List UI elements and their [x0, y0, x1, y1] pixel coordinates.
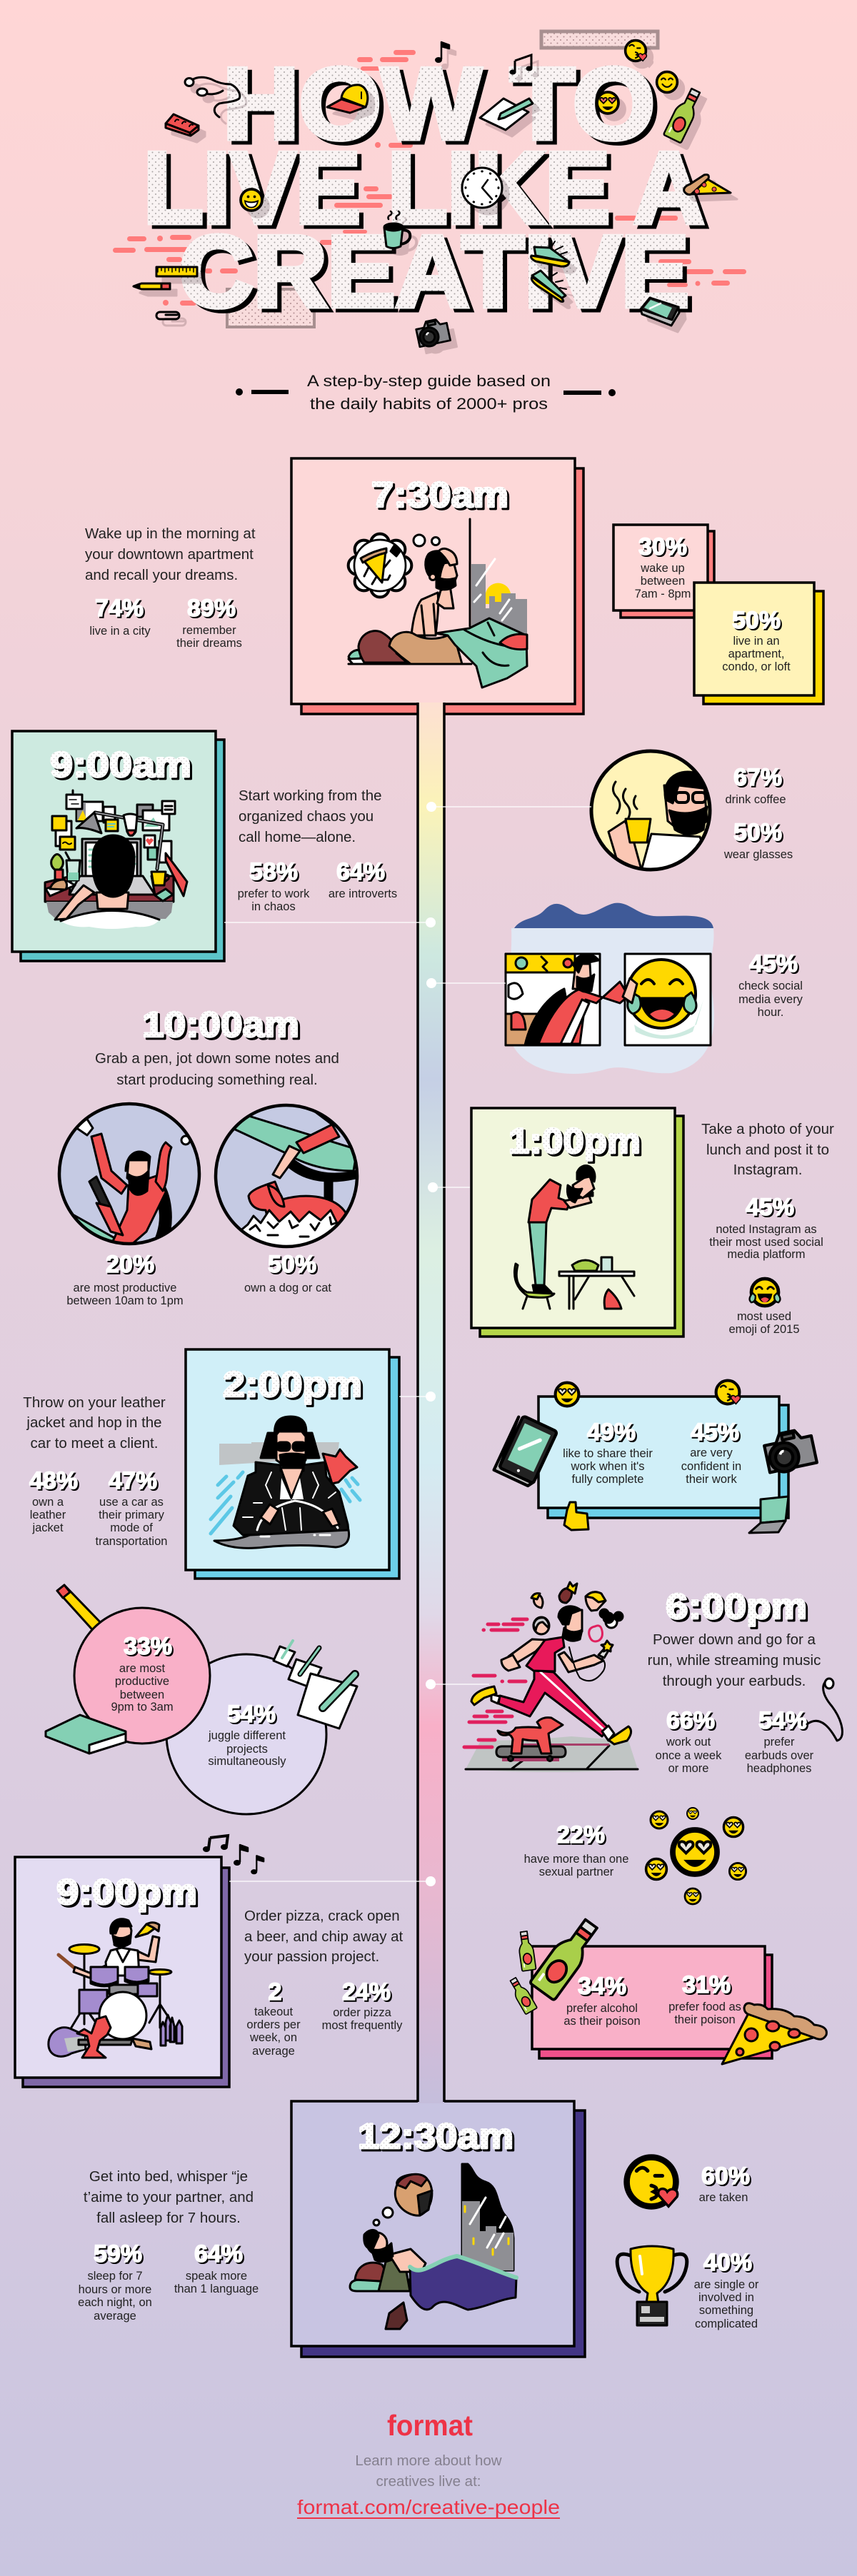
stat: 45% instagram [709, 1194, 823, 1261]
heading: 10:00am: 10:00am [142, 1005, 299, 1045]
heading: 2:00pm: 2:00pm [223, 1364, 362, 1404]
stat: 48%: jacket [31, 1521, 64, 1534]
stat: 45% confident: 45% [691, 1419, 739, 1446]
stat: 89%: remember [182, 624, 236, 637]
stat: 45% confident [681, 1419, 741, 1486]
stat: 64%: are introverts [329, 887, 397, 900]
stat: 45% instagram: media platform [727, 1248, 806, 1261]
stat: 66%: work out [666, 1736, 711, 1749]
icon: camera [763, 1427, 818, 1475]
footer: learn more [355, 2452, 502, 2490]
icon: sneakers [531, 241, 569, 301]
text: take a photo [701, 1121, 834, 1178]
stat: 45% confident: confident in [681, 1460, 741, 1473]
text: start working: organized chaos you [239, 808, 374, 825]
panel: 30% wake up: 7am - 8pm [635, 588, 691, 600]
text: wake up: your downtown apartment [85, 546, 254, 563]
subtitle: the daily habits of 2000+ pros [310, 395, 548, 413]
text: take a photo: Take a photo of your [701, 1121, 834, 1137]
stat: 89%: their dreams [176, 637, 242, 650]
stat: 40%: something [699, 2304, 753, 2317]
stat: 64% [329, 858, 397, 900]
title: HOW TO [223, 47, 655, 161]
stat: 50% glasses: 50% [733, 819, 782, 846]
icon: heart eyes emoji [597, 92, 618, 114]
stat: 31%: prefer food as [668, 2001, 741, 2013]
icon: kiss emoji [716, 1381, 741, 1404]
stat: 45% social media: hour. [758, 1006, 783, 1019]
illustration: photographing lunch [514, 1166, 634, 1309]
text: grab a pen [95, 1050, 339, 1088]
panel: 9:00am [12, 731, 224, 961]
text: take a photo: lunch and post it to [706, 1142, 829, 1158]
stat: 31%: 31% [682, 1971, 731, 1998]
stat: 33%: between [120, 1689, 164, 1701]
stat: 64% languages [174, 2240, 259, 2295]
circle: 54% juggling [166, 1654, 326, 1814]
stat: 34%: as their poison [563, 2015, 641, 2028]
icon: multitasking circle [57, 1104, 199, 1257]
subtitle [307, 372, 551, 413]
icon: drinking coffee circle [591, 751, 714, 878]
icon: laughing emoji [750, 1279, 780, 1306]
stat: 54% earbuds: headphones [747, 1762, 811, 1775]
title icons [134, 41, 731, 348]
stat: 45% confident: their work [686, 1473, 738, 1486]
panel: 50% apartment: live in an [733, 635, 780, 648]
timeline dots [426, 802, 438, 1886]
illustration: notes and pens [274, 1641, 357, 1729]
icon: pizza slice [684, 175, 731, 194]
stat: 47%: transportation [96, 1535, 167, 1548]
heading: 6:00pm: 6:00pm [666, 1586, 807, 1626]
panel: 50% apartment: apartment, [728, 648, 784, 660]
stat: 74%: 74% [95, 595, 144, 622]
stat: 58%: 58% [249, 858, 298, 885]
stat: 66%: or more [668, 1762, 708, 1775]
stat: 20% [66, 1251, 184, 1307]
stat: 24%: 24% [342, 1978, 391, 2006]
text: power down: run, while streaming music [648, 1652, 821, 1669]
stat: 45% instagram: their most used social [709, 1236, 823, 1249]
icon: kiss emoji [627, 2158, 678, 2206]
stat: 33%: 33% [124, 1633, 172, 1660]
text: order pizza: a beer, and chip away at [244, 1928, 404, 1945]
title [144, 47, 704, 328]
panel: 2:00pm [186, 1349, 399, 1579]
icon: music notes [435, 42, 533, 74]
text: get into bed: t’aime to your partner, and [84, 2189, 254, 2205]
stat: 45% social media: 45% [749, 950, 798, 977]
stat: 74%: live in a city [89, 625, 151, 638]
icon: clock [462, 168, 502, 208]
circle: 33% productive [74, 1608, 210, 1744]
icon: bottles [507, 1915, 603, 2015]
icon: earbuds [185, 77, 240, 117]
icon: ruler [156, 267, 197, 276]
icon: smile emoji [657, 72, 677, 92]
stat: 40%: 40% [703, 2249, 752, 2276]
stat: 60%: are taken [699, 2191, 748, 2204]
heading: 1:00pm: 1:00pm [508, 1121, 641, 1161]
stat: 54% earbuds: 54% [758, 1707, 807, 1734]
stat: 2 takeout: takeout [254, 2006, 293, 2018]
stat: 34%: 34% [578, 1973, 626, 2000]
panel: 12:30am [291, 2101, 585, 2357]
text: throw on jacket [23, 1394, 166, 1451]
stat: 59%: 59% [94, 2240, 142, 2268]
text: start working: call home—alone. [239, 829, 356, 845]
stat: 47%: mode of [110, 1521, 153, 1534]
icon: coffee mug [384, 211, 410, 248]
stat: 59%: hours or more [79, 2283, 151, 2296]
stat: 60% [699, 2163, 750, 2204]
icon: music notes [203, 1836, 264, 1874]
stat: 89% [176, 595, 242, 650]
footer: format logo: format [387, 2409, 473, 2442]
timeline [224, 703, 591, 2103]
panel: 50% apartment: 50% [732, 607, 781, 634]
heading: 9:00am: 9:00am [50, 745, 191, 785]
stat: 47%: 47% [109, 1467, 157, 1494]
header decor: coral speed dashes [113, 50, 746, 306]
stat: 34%: prefer alcohol [566, 2002, 638, 2015]
stat: 33%: productive [115, 1675, 169, 1688]
panel: 9:00pm [15, 1857, 229, 2087]
heading: 12:30am: 12:30am [358, 2116, 513, 2156]
illustration: runner and dog on skateboard [464, 1582, 638, 1772]
stat: 58% [238, 858, 310, 913]
text: throw on jacket: jacket and hop in the [26, 1414, 162, 1431]
text: order pizza: your passion project. [244, 1948, 379, 1965]
stat: 54% earbuds: prefer [763, 1736, 795, 1749]
stat: 66%: 66% [666, 1707, 715, 1734]
stat: 54%: juggle different [208, 1729, 286, 1742]
illustration: driving [211, 1417, 360, 1548]
stat: 33%: 9pm to 3am [111, 1701, 174, 1714]
footer: learn more: creatives live at: [376, 2473, 481, 2490]
panel: 50% apartment: condo, or loft [722, 660, 791, 673]
stat: 50% glasses: wear glasses [723, 848, 793, 861]
stat: 20%: 20% [106, 1251, 154, 1278]
stat: 40%: complicated [695, 2318, 758, 2330]
stat: 54%: 54% [227, 1701, 276, 1728]
text: order pizza: Order pizza, crack open [244, 1908, 400, 1924]
icon: beer bottle [663, 86, 704, 143]
subtitle ornaments [236, 388, 616, 396]
stat: 45% social media [738, 950, 803, 1019]
stat: 54% earbuds [745, 1707, 814, 1775]
stat: 2 takeout: orders per [246, 2018, 301, 2031]
stat: 24%: order pizza [333, 2006, 392, 2019]
stat: 47%: use a car as [99, 1496, 164, 1509]
illustration: social media [506, 903, 714, 1074]
icon: heart-eyes emoji cluster [646, 1808, 746, 1904]
illustration: working at a messy desk [45, 790, 187, 929]
stat: 2 takeout: average [252, 2045, 295, 2058]
text: wake up: Wake up in the morning at [85, 525, 256, 542]
panel: 1:00pm [471, 1108, 683, 1337]
header decor: dotted frames [227, 31, 658, 327]
icon: tablet [494, 1414, 557, 1487]
text: start working: Start working from the [239, 788, 382, 804]
icon: kiss emoji [626, 41, 646, 61]
text: wake up: and recall your dreams. [85, 567, 238, 583]
stat: 48% [29, 1467, 78, 1534]
stat: 49%: work when it's [570, 1460, 645, 1473]
icon: note and pen [480, 99, 533, 130]
stat: 22%: have more than one [524, 1853, 628, 1866]
speed lines [464, 1619, 527, 1747]
footer: link: format.com/creative-people [297, 2496, 560, 2518]
text: order pizza [244, 1908, 404, 1965]
stat: 58%: prefer to work [238, 887, 310, 900]
illustration: waking up in bed [348, 519, 527, 688]
stat: 40%: are single or [694, 2278, 759, 2291]
connector lines [224, 807, 591, 1881]
stat: 74% [89, 595, 151, 638]
text: grab a pen: Grab a pen, jot down some notes and [95, 1050, 339, 1067]
stat: 59%: average [94, 2310, 136, 2323]
icon: cap [327, 85, 368, 113]
text: get into bed [84, 2168, 254, 2226]
stat: 22% [524, 1821, 628, 1878]
stat: 54% earbuds: earbuds over [745, 1749, 814, 1762]
text: most used emoji: emoji of 2015 [728, 1323, 800, 1336]
stat: 47%: their primary [99, 1509, 165, 1521]
stat: 67%: drink coffee [726, 793, 786, 806]
stat: 2 takeout: week, on [249, 2031, 297, 2044]
stat: 45% instagram: noted Instagram as [716, 1223, 817, 1236]
icon: dog and chair circle [216, 1103, 357, 1253]
stat: 50% pets: 50% [268, 1251, 316, 1278]
text: grab a pen: start producing something real. [116, 1072, 318, 1088]
text: throw on jacket: Throw on your leather [23, 1394, 166, 1411]
icon: pizza slice [722, 2003, 826, 2064]
stat: 45% confident: are very [690, 1447, 733, 1459]
panel: 30% wake up: wake up [640, 562, 685, 575]
text: get into bed: Get into bed, whisper “je [89, 2168, 248, 2185]
stat: 67% [726, 764, 786, 806]
stat: 31%: their poison [674, 2013, 736, 2026]
stat: 45% social media: check social [738, 980, 803, 992]
stat: 59%: sleep for 7 [87, 2270, 143, 2283]
stat: 49%: fully complete [572, 1473, 643, 1486]
stat: 20%: are most productive [74, 1282, 176, 1294]
panel: 50% apartment [694, 583, 823, 704]
icon: lego brick [166, 114, 199, 136]
stat: 48%: 48% [29, 1467, 78, 1494]
stat: 58%: in chaos [251, 900, 296, 913]
stat: 59% [78, 2240, 152, 2323]
stat: 60%: 60% [701, 2163, 750, 2190]
heading: 7:30am: 7:30am [371, 475, 508, 515]
stat: 64% languages: speak more [186, 2270, 247, 2283]
stat: 89%: 89% [187, 595, 236, 622]
stat: 50% glasses [723, 819, 793, 861]
icon: earbud cord [807, 1679, 842, 1741]
text: get into bed: fall asleep for 7 hours. [96, 2210, 241, 2226]
stat: 64% languages: 64% [194, 2240, 243, 2268]
icon: trophy [617, 2246, 687, 2325]
illustration: pencil [57, 1585, 112, 1643]
stat: 2 takeout: 2 [269, 1978, 281, 2006]
stat: 66%: once a week [656, 1749, 722, 1762]
stat: 22%: sexual partner [539, 1866, 614, 1878]
title: CREATIVE [179, 215, 689, 328]
text: most used emoji: most used [737, 1310, 791, 1323]
text: start working [239, 788, 382, 845]
panel: 7:30am [291, 458, 583, 714]
stat: 64% languages: than 1 language [174, 2283, 259, 2295]
stat: 49%: like to share their [563, 1447, 653, 1460]
illustration: drummer eating pizza [49, 1919, 182, 2058]
icon: grinning emoji [241, 189, 262, 211]
stat: 48%: leather [30, 1509, 66, 1521]
stat: 20%: between 10am to 1pm [66, 1294, 184, 1307]
stat: 49% [563, 1419, 653, 1486]
panel: 30% wake up [613, 525, 714, 618]
stat: 67%: 67% [733, 764, 782, 791]
panel: 30% wake up: 30% [638, 533, 687, 560]
stat: 33%: are most [119, 1662, 166, 1675]
icon: paper clip [156, 312, 179, 319]
stat: 45% instagram: 45% [746, 1194, 794, 1221]
illustration: green book [46, 1715, 126, 1754]
stat: 33% [111, 1633, 174, 1714]
text: most used emoji [728, 1310, 800, 1336]
stat: 34% [563, 1973, 641, 2028]
icon: camera [415, 318, 451, 348]
stat: 40% [694, 2249, 759, 2330]
panel: 30% wake up: between [641, 575, 685, 588]
subtitle: A step-by-step guide based on [307, 372, 551, 390]
heading: 9:00pm: 9:00pm [56, 1872, 197, 1912]
stat: 54%: projects [226, 1743, 268, 1756]
footer: learn more: Learn more about how [355, 2452, 502, 2469]
stat: 54%: simultaneously [208, 1755, 286, 1768]
stat: 31% [668, 1971, 741, 2026]
panel: alcohol or food [532, 1946, 772, 2058]
text: power down: Power down and go for a [653, 1631, 816, 1648]
stat: 50% pets [244, 1251, 331, 1294]
text: power down: through your earbuds. [663, 1673, 806, 1689]
stat: 2 takeout [246, 1978, 301, 2058]
icon: thumbs up [564, 1502, 588, 1530]
text: wake up [85, 525, 256, 583]
stat: 64%: 64% [336, 858, 385, 885]
stat: 24%: most frequently [322, 2019, 403, 2032]
stat: 49%: 49% [587, 1419, 636, 1446]
icon: laptop [749, 1496, 788, 1533]
icon: heart eyes emoji [556, 1383, 578, 1406]
icon: pencil [134, 283, 170, 289]
stat: 54% [208, 1701, 286, 1768]
icon: tablet [641, 298, 679, 326]
stat: 59%: each night, on [78, 2296, 152, 2309]
stat: 40%: involved in [698, 2291, 754, 2304]
stat: 66% [656, 1707, 722, 1775]
illustration: sleeping in bed [350, 2164, 516, 2329]
text: take a photo: Instagram. [733, 1162, 802, 1178]
title: LIVE LIKE A [144, 131, 704, 245]
stat: 45% social media: media every [738, 993, 803, 1006]
stat: 48%: own a [32, 1496, 64, 1509]
panel: sharing work [538, 1397, 788, 1518]
stat: 50% pets: own a dog or cat [244, 1282, 331, 1294]
text: throw on jacket: car to meet a client. [31, 1435, 158, 1451]
stat: 22%: 22% [556, 1821, 605, 1848]
stat: 24% [322, 1978, 403, 2032]
text: power down [648, 1631, 821, 1689]
stat: 47% [96, 1467, 167, 1548]
